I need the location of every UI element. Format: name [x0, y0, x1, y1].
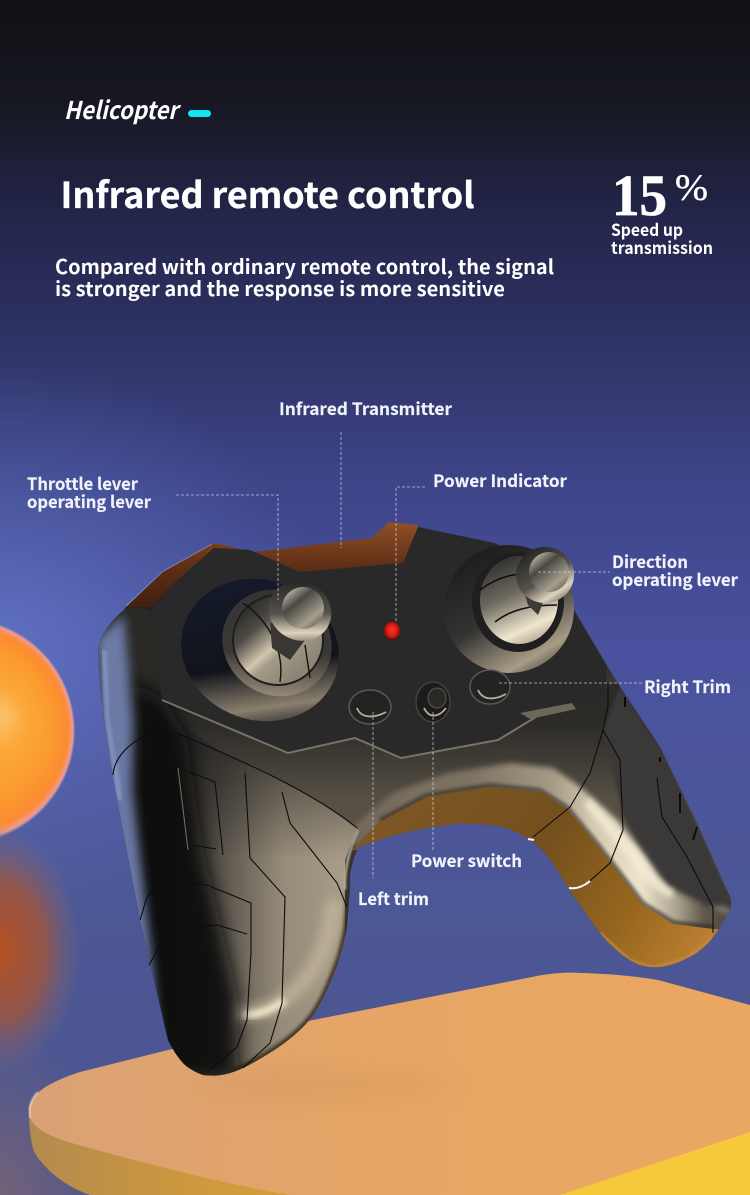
body shading: [90, 607, 750, 1085]
stat caption: [611, 217, 713, 259]
grip bottom glow: [232, 900, 334, 1013]
label: Direction operating lever: Direction: [612, 549, 688, 573]
grip outer brown rim: [230, 890, 350, 1073]
left stick dish: [234, 596, 322, 684]
stat caption: transmission: [611, 235, 713, 259]
table top surface: [29, 973, 750, 1195]
stat caption: Speed up: [611, 217, 683, 241]
right stick: [444, 545, 574, 673]
left stick: [161, 557, 359, 743]
stat: 15%: 15: [612, 163, 667, 228]
cyan accent pill: [188, 110, 211, 117]
controller silhouette: [98, 527, 731, 1076]
description text: Compared with ordinary remote control, the signal: [55, 251, 554, 280]
label: Left trim: Left trim: [358, 886, 429, 910]
label: Power switch: Power switch: [411, 848, 522, 872]
description text: [55, 251, 554, 302]
metal arch band: [355, 763, 735, 935]
left stick base: [161, 557, 359, 743]
left stick dish border: [232, 594, 324, 686]
label: Throttle lever: operating lever: [27, 489, 152, 513]
label: Direction operating lever: [612, 549, 739, 591]
right stick base: [444, 545, 574, 673]
table rim highlight: [29, 1092, 38, 1118]
ball reflection: [0, 825, 82, 1075]
right stick ring: [472, 552, 564, 652]
leader lines: [176, 432, 643, 878]
top face plate: [151, 527, 607, 758]
description text: is stronger and the response is more sensitive: [55, 273, 505, 302]
left trim button: [349, 690, 391, 724]
orange underside: [352, 787, 718, 968]
orange transmitter wing: [124, 522, 418, 612]
grip bright highlight: [242, 1000, 285, 1015]
label: Throttle lever: Throttle lever: [27, 471, 139, 495]
table yellow edge: [540, 1132, 750, 1195]
label: Infrared Transmitter: Infrared Transmitter: [279, 396, 453, 420]
blue left highlight: [96, 615, 160, 1040]
right grip end glow: [708, 906, 732, 924]
right stick shaft: [522, 585, 548, 615]
title: Infrared remote control: [60, 168, 474, 219]
controller: [90, 522, 750, 1085]
left stick shaft: [270, 622, 305, 660]
seam light edges: [178, 768, 188, 850]
left stick cap: [258, 570, 342, 652]
middle body: [150, 680, 730, 905]
grip arch edge: [345, 830, 358, 890]
white specks: [528, 839, 590, 888]
left stick ring: [201, 568, 353, 718]
black grip band: [130, 680, 238, 1080]
brand label: Helicopter: Helicopter: [64, 92, 182, 127]
right grip panel: [603, 687, 735, 925]
bright left rim: [104, 650, 120, 800]
LED power indicator: [384, 622, 400, 640]
grip upper shade: [181, 736, 357, 850]
left grip: [90, 607, 357, 1085]
arch lower shadow: [380, 785, 713, 927]
plate bevel edge: [162, 700, 536, 758]
underside lower rim: [600, 933, 713, 967]
vent slot: [520, 703, 576, 719]
label: Throttle lever: [27, 471, 152, 513]
stat: 15%: [612, 163, 708, 228]
label: Direction operating lever: operating lever: [612, 567, 739, 591]
wing light edge: [126, 544, 212, 606]
right stick dish: [480, 556, 558, 644]
right stick cap: [516, 547, 574, 603]
power switch button: [416, 682, 450, 722]
controller shadow on table: [190, 1071, 450, 1099]
body seams: [113, 683, 713, 1070]
label: Power Indicator: Power Indicator: [433, 468, 568, 492]
arch highlight: [587, 802, 672, 895]
table platform: [29, 973, 750, 1195]
right trim button: [470, 670, 510, 704]
orange ball: [0, 625, 75, 837]
table side face: [29, 1100, 750, 1195]
stat: 15%: %: [675, 168, 708, 209]
label: Right Trim: Right Trim: [644, 674, 731, 698]
